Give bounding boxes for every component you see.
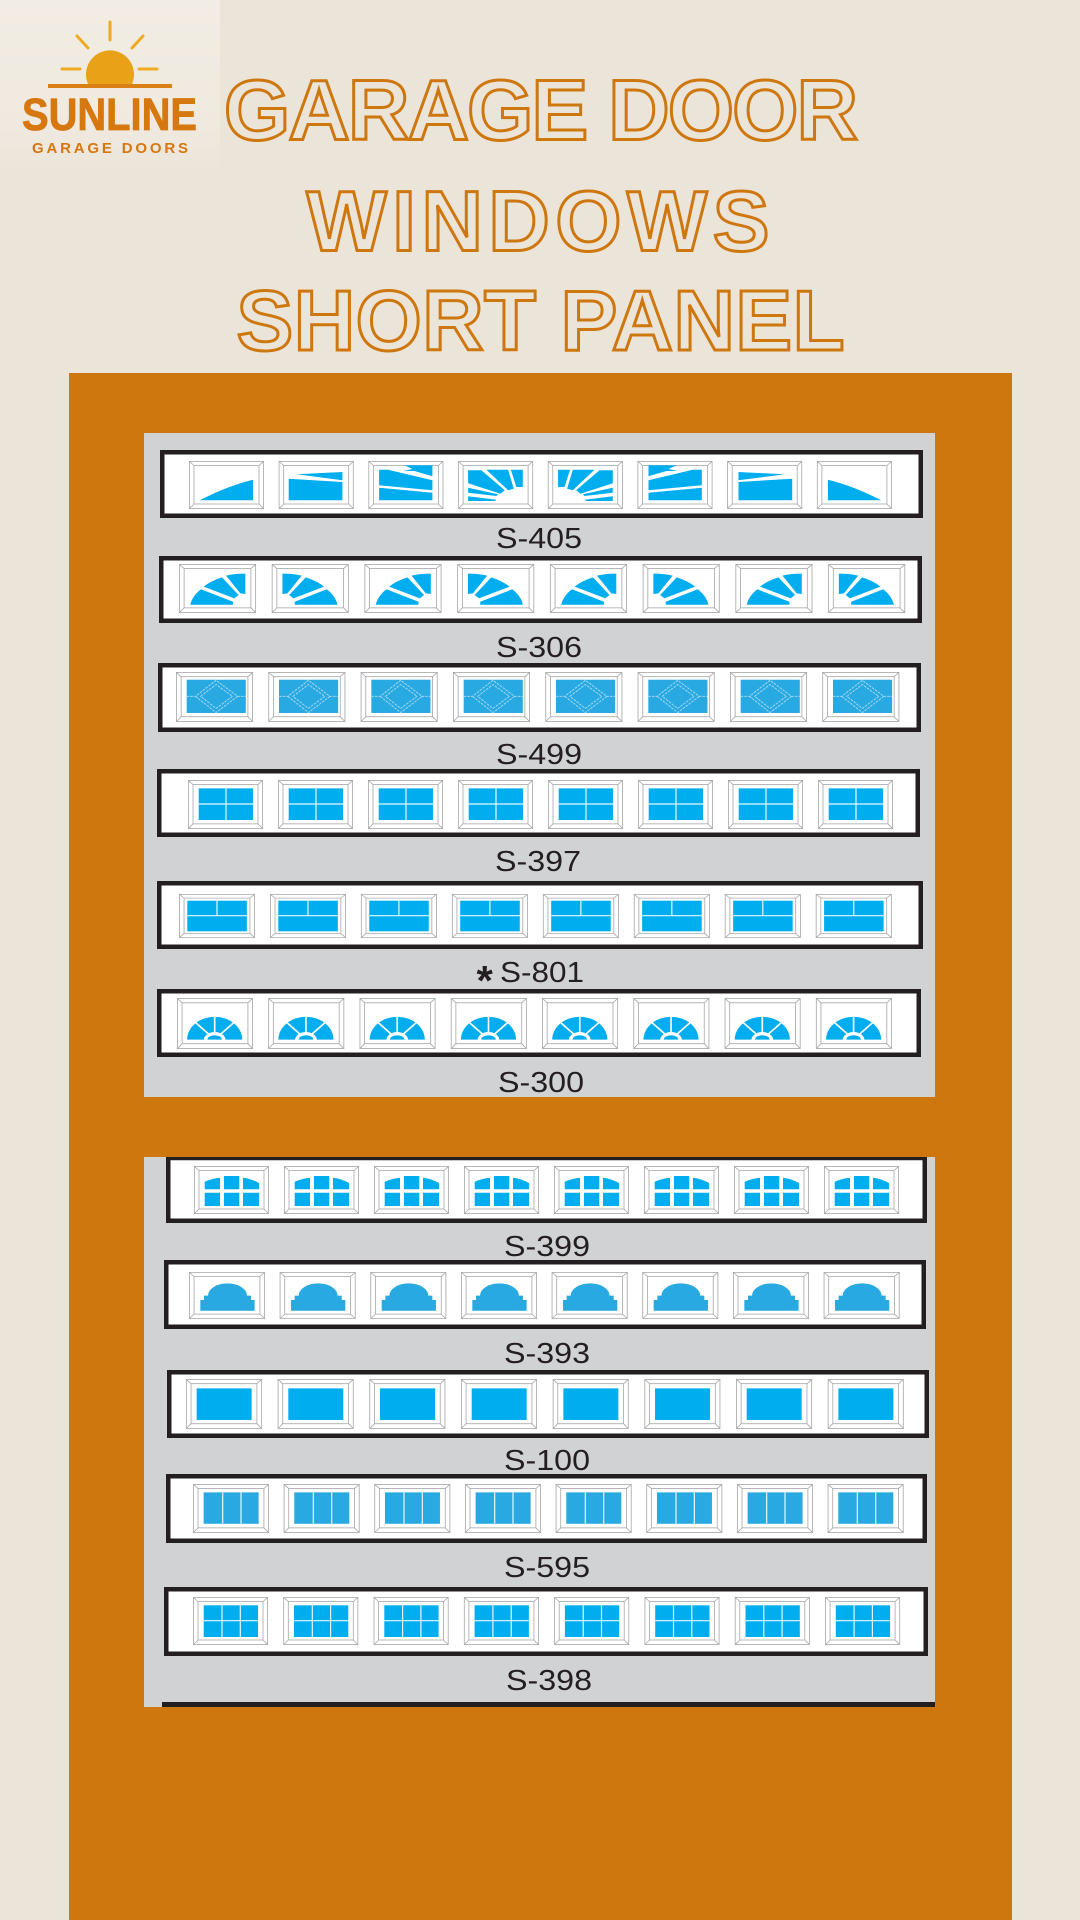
- row: S-393: [166, 1262, 924, 1370]
- row: S-300: [159, 991, 919, 1099]
- label: S-306: S-306: [496, 632, 582, 664]
- label: S-595: S-595: [504, 1552, 590, 1584]
- logo wordmark: SUNLINE: [22, 89, 197, 140]
- row: S-398: [166, 1589, 926, 1697]
- logo tagline: GARAGE DOORS: [32, 140, 188, 157]
- logo: Sunline Garage Doors: [0, 0, 220, 172]
- row: S-399: [168, 1158, 925, 1263]
- label: asterisk S-801: *: [476, 957, 494, 1004]
- row: S-100: [169, 1372, 927, 1477]
- label: S-397: S-397: [495, 846, 581, 878]
- row: S-595: [168, 1476, 925, 1584]
- label: S-393: S-393: [504, 1338, 590, 1370]
- label: S-405: S-405: [496, 523, 582, 555]
- label: asterisk S-801: [476, 957, 584, 1004]
- row: S-397: [159, 771, 918, 878]
- title: SHORT PANEL: [236, 274, 844, 369]
- label: S-398: S-398: [506, 1665, 592, 1697]
- row: S-499: [160, 665, 919, 771]
- label: S-399: S-399: [504, 1231, 590, 1263]
- panel: first window styles: [144, 433, 935, 1099]
- label: S-100: S-100: [504, 1445, 590, 1477]
- row: S-306: [161, 558, 920, 664]
- panel: second window styles: [144, 1157, 935, 1707]
- label: S-499: S-499: [496, 739, 582, 771]
- label: asterisk S-801: S-801: [500, 957, 584, 989]
- cropped next row edge: [162, 1702, 935, 1707]
- row: S-405: [162, 452, 921, 555]
- icon: rising sun: [48, 22, 172, 88]
- title: [224, 64, 858, 369]
- title: WINDOWS: [306, 174, 770, 270]
- title: GARAGE DOOR: [224, 64, 858, 158]
- row: S-801: [159, 883, 921, 1004]
- label: S-300: S-300: [498, 1067, 584, 1099]
- panel: orange backing: [69, 373, 1012, 1920]
